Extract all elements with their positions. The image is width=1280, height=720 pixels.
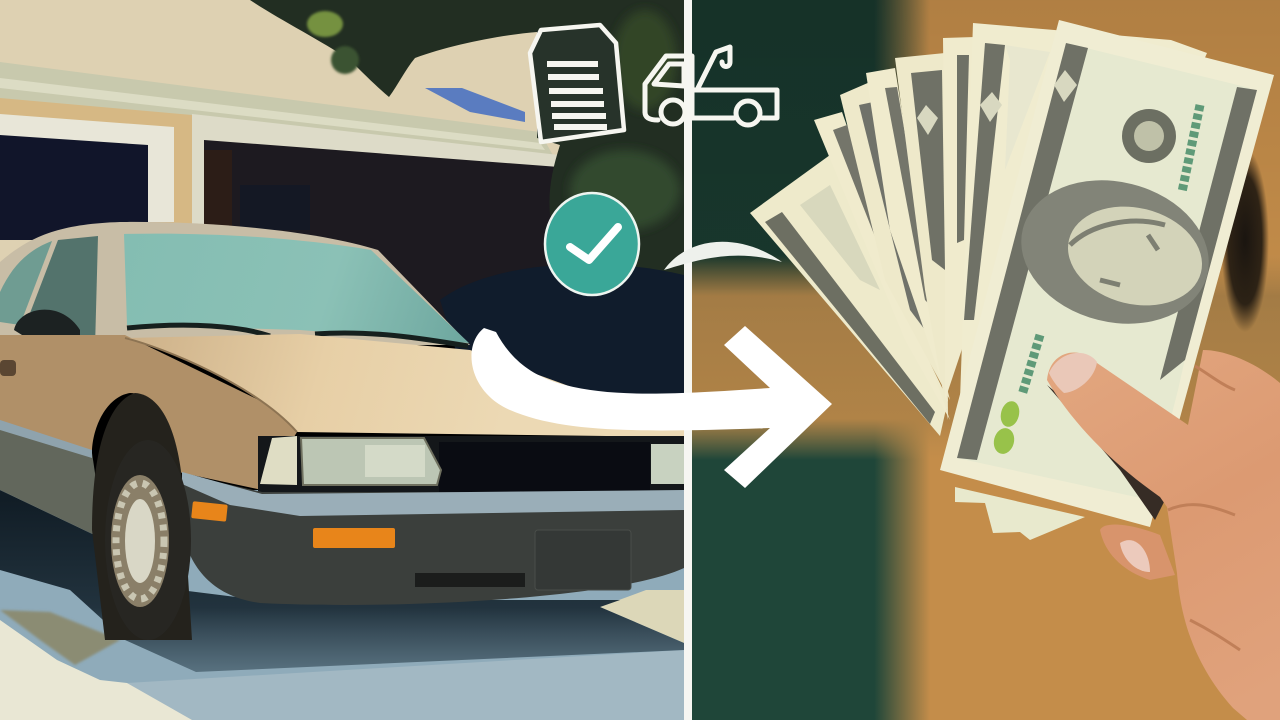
blue tarp patch [425, 88, 525, 122]
garage door left [0, 114, 174, 240]
palm and thumb [1047, 350, 1280, 720]
icon: check badge [545, 193, 639, 295]
panel: cash background [692, 0, 1280, 720]
banknote 2 [814, 112, 950, 420]
panel: old car in driveway [0, 0, 684, 720]
bumper [182, 474, 684, 605]
hood [125, 334, 684, 437]
icon: tow truck [645, 47, 777, 125]
seal [1122, 109, 1176, 163]
divider line [684, 0, 692, 720]
licence plate [535, 530, 631, 590]
front side window [30, 236, 98, 335]
tan lower wall [0, 98, 192, 224]
banknote 3 [840, 82, 950, 400]
cash fan [750, 20, 1274, 540]
tree foliage [250, 0, 684, 295]
wiper blades [127, 325, 468, 346]
car roof glint [664, 242, 782, 270]
house wall [0, 0, 560, 262]
lower notes [955, 487, 1085, 540]
wheel arch [92, 393, 192, 640]
corner light [260, 436, 297, 485]
portrait oval [1006, 161, 1224, 343]
banknote 6 [943, 37, 975, 400]
rear side window [0, 241, 52, 325]
car [0, 222, 684, 640]
banknote 7 [960, 23, 1207, 400]
thumbnail [1049, 353, 1097, 393]
finger nail [1120, 540, 1150, 572]
arrow [471, 326, 832, 488]
garage door right [192, 114, 559, 320]
tyre [182, 478, 191, 576]
door lower panel [0, 430, 96, 534]
green serial marks [1182, 105, 1200, 192]
roof fascia band [0, 62, 552, 154]
amber marker left [191, 501, 228, 522]
bumper slot [415, 573, 525, 587]
windshield [124, 234, 469, 343]
banknote 1 [750, 155, 948, 436]
front face dark band [258, 436, 684, 492]
hubcap [111, 475, 169, 607]
banknote 4 [866, 68, 948, 400]
headlight left [301, 438, 441, 485]
banknote 5 [895, 53, 948, 420]
driveway [0, 490, 684, 720]
back finger [1100, 525, 1175, 580]
icon: document [530, 25, 624, 142]
door handle [0, 360, 16, 376]
front banknote [940, 20, 1274, 527]
car upper body and roof [0, 222, 470, 345]
green seal [991, 399, 1022, 456]
hand holding cash [1047, 350, 1280, 720]
grille [439, 442, 650, 497]
dark car behind [440, 264, 684, 395]
amber marker centre [313, 528, 395, 548]
door and fender panel [0, 335, 300, 490]
headlight right [651, 444, 684, 484]
steering wheel and seat [14, 310, 80, 335]
shadow wedge under thumb [1047, 385, 1170, 520]
